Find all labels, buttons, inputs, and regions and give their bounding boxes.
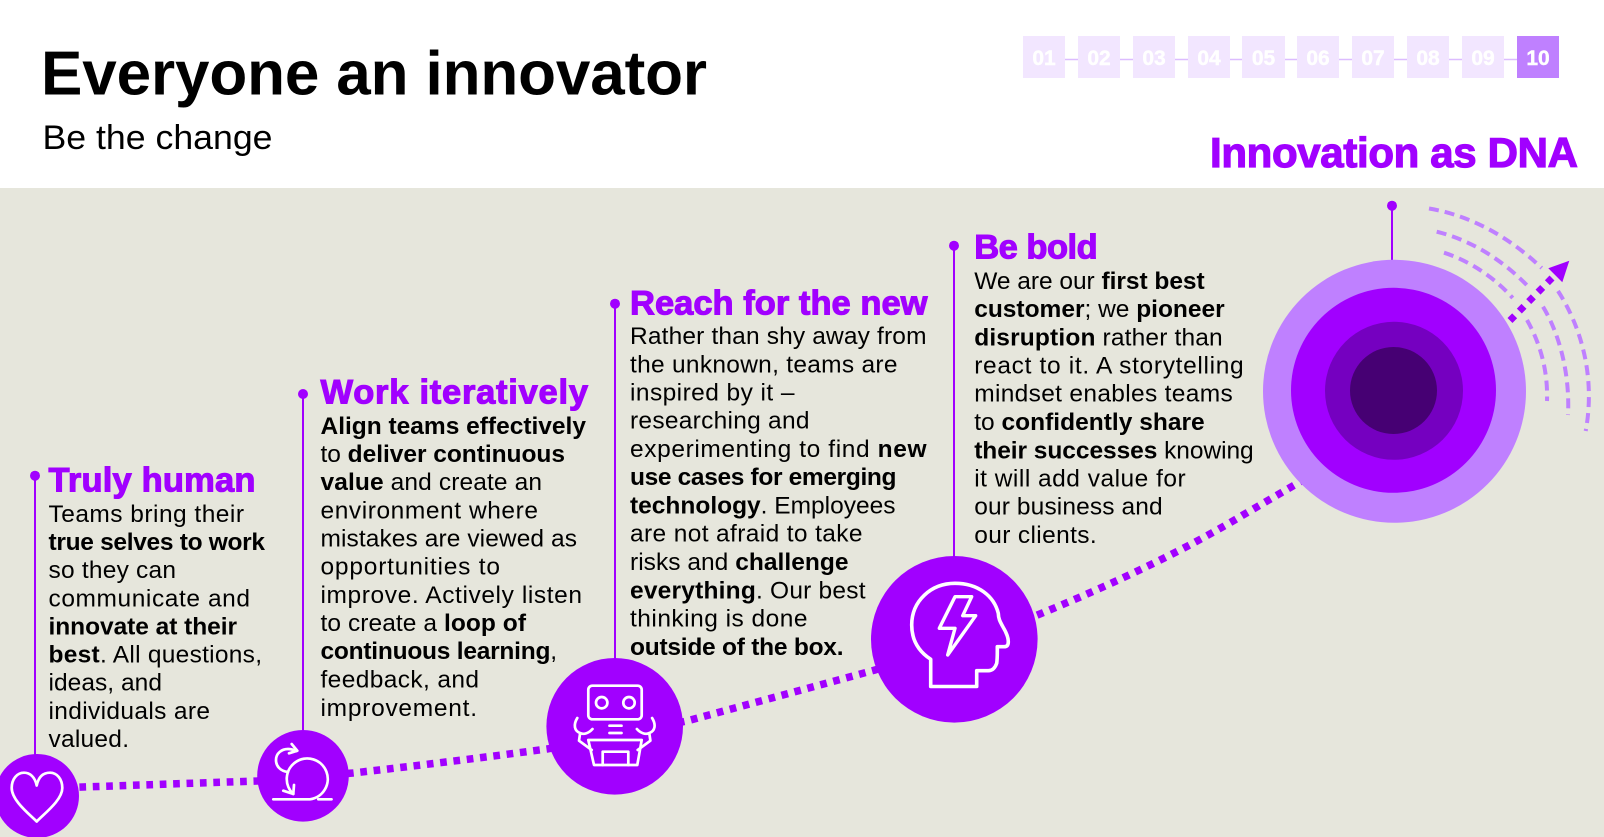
body text: react to it. A storytelling	[974, 352, 1244, 380]
body text: We are our first best	[974, 268, 1205, 295]
dotted arrow	[1510, 261, 1569, 320]
progress tracker 01 to 10: 01	[1032, 47, 1056, 70]
body text	[974, 268, 1254, 549]
body text: researching and	[630, 408, 810, 435]
title: Everyone an innovator	[41, 40, 707, 108]
concentric circles	[1263, 260, 1526, 523]
body text: Rather than shy away from	[630, 323, 926, 350]
body text: disruption rather than	[974, 324, 1223, 351]
body text: our clients.	[974, 522, 1097, 549]
progress tracker 01 to 10	[1023, 36, 1559, 78]
heading: Truly human	[48, 462, 256, 500]
body text: risks and challenge	[630, 549, 848, 576]
progress tracker 01 to 10: 08	[1416, 47, 1440, 70]
icon: head with lightning bolt in circle	[871, 556, 1038, 723]
header: title block	[41, 40, 707, 157]
heading: Work iteratively	[320, 373, 588, 411]
body text: innovate at their	[48, 613, 237, 640]
body text: valued.	[48, 726, 129, 753]
body text: mindset enables teams	[974, 381, 1233, 408]
heading: Be bold	[974, 228, 1098, 266]
progress tracker 01 to 10: 04	[1197, 47, 1221, 70]
step 3: Reach for the new	[546, 284, 928, 795]
body text: to create a loop of	[320, 610, 527, 637]
body text: inspired by it –	[630, 380, 795, 407]
body text: technology. Employees	[630, 492, 896, 519]
pin	[30, 471, 40, 756]
body text: true selves to work	[48, 529, 265, 556]
progress tracker 01 to 10: 02	[1087, 47, 1111, 70]
body text: the unknown, teams are	[630, 351, 898, 378]
step 4: Be bold	[871, 228, 1254, 723]
body text: so they can	[48, 557, 176, 584]
body text: Teams bring their	[48, 501, 244, 528]
body text: best. All questions,	[48, 642, 262, 668]
body text: mistakes are viewed as	[320, 525, 577, 552]
body text: environment where	[320, 497, 538, 524]
body text: individuals are	[48, 698, 210, 725]
body text: everything. Our best	[630, 577, 866, 604]
body text	[48, 501, 265, 753]
body text: communicate and	[48, 585, 250, 612]
dotted journey path	[66, 476, 1310, 788]
body text: improvement.	[320, 695, 477, 722]
heading: Reach for the new	[630, 284, 928, 322]
body text: Align teams effectively	[320, 413, 586, 440]
pin	[298, 389, 308, 732]
body text: ideas, and	[48, 670, 162, 697]
progress tracker 01 to 10: 09	[1471, 47, 1495, 70]
progress tracker 01 to 10: 06	[1306, 47, 1330, 70]
progress tracker 01 to 10: 03	[1142, 47, 1166, 70]
body text: thinking is done	[630, 606, 808, 633]
body text: continuous learning,	[320, 638, 557, 665]
icon: robot in circle	[546, 658, 683, 795]
heading: Innovation as DNA: Innovation as DNA	[1210, 129, 1578, 176]
body text: are not afraid to take	[630, 521, 862, 548]
progress tracker 01 to 10: 07	[1361, 47, 1385, 70]
step 1: Truly human	[0, 462, 265, 837]
dashed signal arcs	[1429, 208, 1589, 431]
body text: improve. Actively listen	[320, 582, 582, 609]
pin	[949, 241, 959, 558]
icon: iteration loop in circle	[257, 730, 349, 822]
body text: experimenting to find new	[630, 436, 927, 463]
body text: to deliver continuous	[320, 441, 565, 468]
body text: feedback, and	[320, 666, 479, 693]
body text: use cases for emerging	[630, 464, 896, 491]
icon: heart in circle	[0, 754, 79, 837]
step 5: innovation target	[1263, 201, 1589, 523]
body text: our business and	[974, 494, 1163, 521]
body text: outside of the box.	[630, 634, 844, 661]
progress tracker 01 to 10: 05	[1252, 47, 1275, 70]
pin	[1387, 201, 1397, 262]
body text: customer; we pioneer	[974, 296, 1225, 323]
body text: opportunities to	[320, 554, 500, 580]
body text: value and create an	[320, 469, 542, 496]
body text: it will add value for	[974, 466, 1186, 493]
subtitle: Be the change	[42, 119, 272, 157]
body text: to confidently share	[974, 409, 1205, 436]
progress tracker 01 to 10: 10	[1526, 47, 1550, 70]
body text	[630, 323, 927, 661]
body text: their successes knowing	[974, 437, 1254, 464]
body text	[320, 413, 586, 722]
pin	[610, 299, 620, 660]
step 2: Work iteratively	[257, 373, 588, 822]
